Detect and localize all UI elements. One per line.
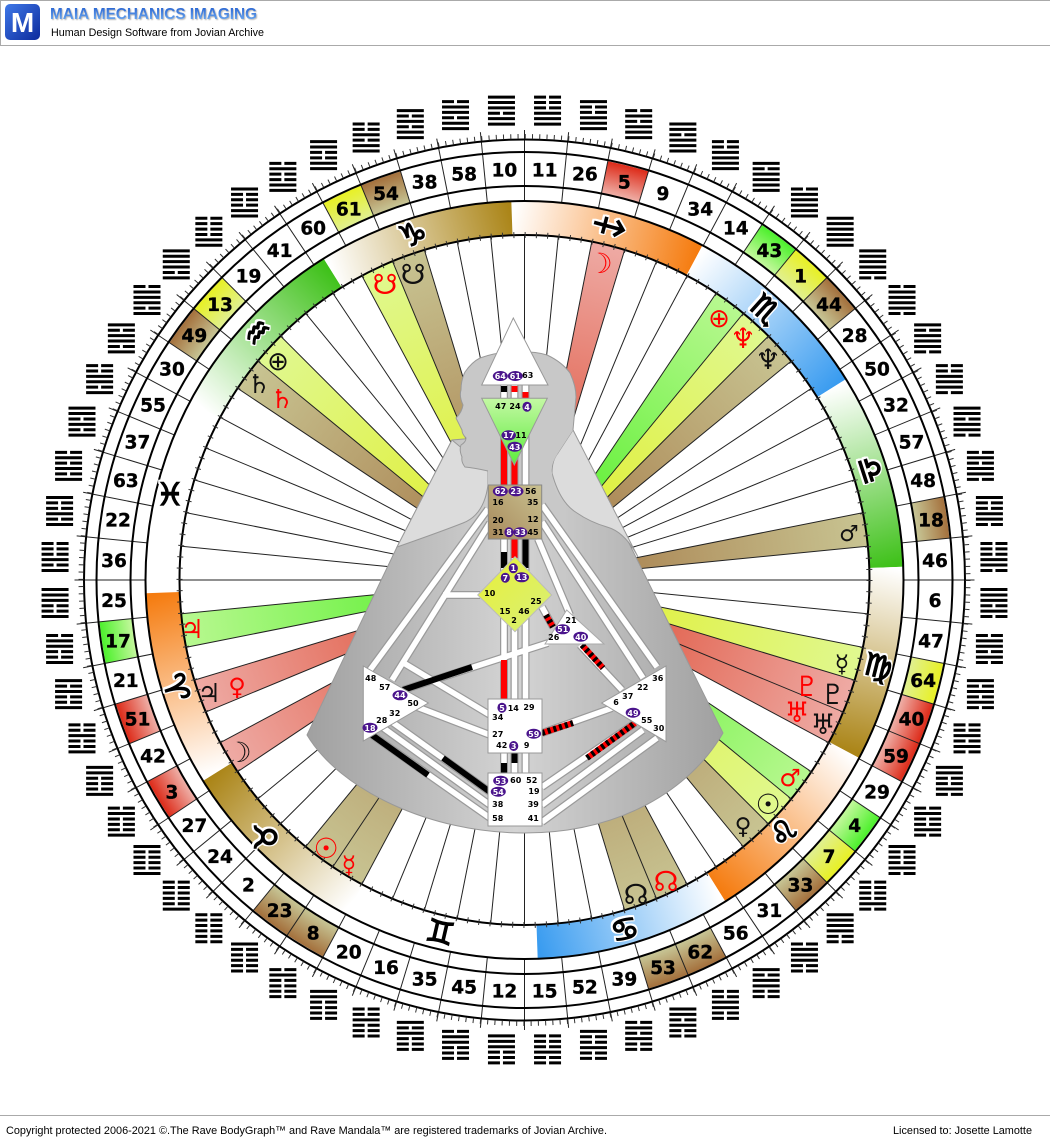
gate numbers ring: 64: [910, 671, 936, 692]
center: throat: [488, 485, 542, 539]
center: solar plexus: [602, 666, 666, 742]
gate numbers ring: 5: [618, 172, 631, 193]
gate numbers ring: 47: [918, 631, 944, 652]
bodygraph gate labels: 54: [493, 788, 504, 797]
gate numbers ring: 22: [105, 511, 131, 532]
gate numbers ring: 36: [101, 551, 127, 572]
planet glyphs: ☿: [342, 851, 356, 879]
gate numbers ring: 17: [105, 631, 131, 652]
gate numbers ring: 52: [572, 978, 598, 999]
planet glyphs: ☋: [373, 268, 397, 301]
gate numbers ring: 11: [532, 160, 558, 181]
gate numbers ring: 61: [336, 199, 362, 220]
gate numbers ring: 1: [794, 266, 807, 287]
bodygraph gate labels: 50: [407, 699, 419, 708]
bodygraph gate labels: 11: [515, 431, 527, 440]
bodygraph gate labels: 27: [492, 730, 503, 739]
planet glyphs: ☊: [624, 878, 648, 911]
planet glyphs: ☉: [755, 788, 781, 821]
planet glyphs: ♆: [730, 322, 756, 355]
gate numbers ring: 32: [883, 395, 909, 416]
bodygraph gate labels: 43: [509, 443, 520, 452]
footer: [0, 1116, 1050, 1137]
band: libra: [832, 388, 886, 567]
gate numbers ring: 9: [657, 184, 669, 205]
gate numbers ring: 49: [181, 326, 207, 347]
bodygraph gate labels: 22: [637, 683, 648, 692]
gate numbers ring: 4: [848, 816, 861, 837]
bodygraph gate labels: 59: [528, 730, 540, 739]
bodygraph gate labels: 53: [495, 777, 506, 786]
gate numbers ring: 8: [307, 924, 320, 945]
zodiac glyphs: ♓: [156, 477, 184, 513]
bodygraph gate labels: 29: [523, 703, 535, 712]
activated channels: design black: [372, 386, 526, 792]
gate numbers ring: 50: [864, 360, 890, 381]
zodiac glyphs: ♏: [743, 287, 787, 333]
planet glyphs: ♃: [197, 679, 221, 709]
gate numbers ring: 38: [412, 172, 438, 193]
zodiac glyphs: ♉: [249, 823, 285, 851]
band: sagittarius: [512, 218, 694, 260]
planet glyphs: ☽: [587, 247, 613, 280]
gate numbers ring: [101, 160, 948, 1003]
gate numbers ring: 3: [166, 782, 178, 803]
gate numbers ring: 55: [140, 395, 166, 416]
bodygraph gate labels: 12: [527, 515, 539, 524]
gate numbers ring: 15: [532, 982, 558, 1003]
gate numbers ring: 44: [816, 295, 842, 316]
bodygraph gate labels: 51: [557, 625, 569, 634]
bodygraph gate labels: 45: [527, 528, 539, 537]
gate numbers ring: 39: [611, 970, 637, 991]
planet glyphs: ☉: [313, 832, 339, 865]
gate numbers ring: 24: [207, 847, 233, 868]
gate numbers ring: 43: [756, 241, 782, 262]
planet glyphs: ☊: [654, 865, 678, 898]
bodygraph gate labels: 9: [524, 741, 530, 750]
band: leo: [716, 750, 844, 887]
planet glyphs: ♀: [228, 673, 246, 701]
gate numbers ring: 20: [336, 943, 362, 964]
bodygraph gate labels: 31: [492, 528, 504, 537]
gate numbers ring: 42: [140, 747, 166, 768]
gate numbers ring: 34: [687, 199, 713, 220]
gate numbers ring: 27: [181, 816, 207, 837]
gate numbers ring: 57: [899, 433, 924, 454]
bodygraph gate labels: 20: [492, 516, 504, 525]
bodygraph silhouette: [307, 352, 723, 833]
center: root: [488, 773, 542, 826]
bodygraph gate labels: 7: [503, 574, 508, 583]
bodygraph gate labels: 62: [495, 487, 506, 496]
bodygraph gate labels: 46: [518, 607, 530, 616]
gate numbers ring: 2: [242, 876, 255, 897]
bodygraph gate labels: 64: [495, 372, 506, 381]
bodygraph gate labels: 17: [503, 431, 514, 440]
gate numbers ring: 14: [723, 218, 749, 239]
bodygraph gate labels: 55: [641, 716, 653, 725]
planet glyphs: ♀: [735, 814, 751, 840]
gate numbers ring: 51: [125, 709, 150, 730]
bodygraph gate labels: 13: [516, 573, 527, 582]
band: taurus: [218, 772, 354, 900]
band: aquarius: [205, 273, 333, 410]
bodygraph gate labels: 28: [376, 716, 388, 725]
zodiac glyphs: ♒: [235, 311, 281, 355]
head and neck: [456, 352, 576, 540]
bodygraph gate labels: 1: [511, 564, 517, 573]
bodygraph gate labels: 26: [548, 633, 560, 642]
gate numbers ring: 26: [572, 164, 598, 185]
band: capricorn: [333, 218, 512, 273]
bodygraph gate labels: 41: [528, 814, 539, 823]
activated channels: black stripes: [542, 615, 635, 758]
bodygraph gate labels: 25: [530, 597, 542, 606]
zodiac glyphs: ♊: [422, 912, 458, 954]
planet glyphs: ☋: [401, 258, 425, 291]
bodygraph gate labels: 57: [379, 683, 390, 692]
license note: Licensed to: Josette Lamotte: [893, 1125, 1032, 1137]
bodygraph gate labels: 6: [613, 698, 619, 707]
planet glyphs: ♇: [794, 670, 820, 703]
gate numbers ring: 37: [125, 433, 150, 454]
gate numbers ring: 45: [451, 978, 477, 999]
band: aries: [163, 593, 218, 772]
gate numbers ring: 29: [864, 782, 890, 803]
center: G: [478, 557, 552, 632]
gate numbers ring: 6: [929, 591, 941, 612]
zodiac glyphs: ♌: [761, 810, 807, 856]
bodygraph gate labels: 42: [496, 741, 507, 750]
body lower cone: [307, 430, 723, 833]
planet glyphs: ♆: [755, 343, 781, 376]
bodygraph gate labels: 60: [510, 776, 522, 785]
bodygraph gate labels: 15: [499, 607, 511, 616]
band: scorpio: [694, 260, 832, 388]
gate numbers ring: 23: [267, 901, 293, 922]
gate numbers ring: 13: [207, 295, 233, 316]
gate numbers ring: 60: [300, 218, 326, 239]
gate numbers ring: 53: [650, 958, 676, 979]
bodygraph gate labels: 21: [565, 616, 577, 625]
center: sacral: [488, 699, 542, 753]
gate numbers ring: 56: [723, 924, 749, 945]
subtitle: Human Design Software from Jovian Archive: [51, 27, 264, 39]
gate numbers ring: 40: [899, 709, 924, 730]
header bar: [0, 0, 1050, 46]
bodygraph gate labels: 5: [499, 704, 505, 713]
bodygraph gate labels: 63: [522, 371, 533, 380]
gate numbers ring: 28: [842, 326, 868, 347]
bodygraph gate labels: 4: [524, 403, 530, 412]
icon: logo M: M: [11, 7, 34, 38]
gate numbers ring: 48: [910, 471, 936, 492]
zodiac glyphs: ♐: [585, 206, 631, 248]
bodygraph gate labels: 56: [525, 487, 537, 496]
planet glyphs: ☿: [835, 650, 849, 678]
bodygraph gate labels: 24: [509, 402, 521, 411]
bodygraph gate labels: 61: [510, 372, 521, 381]
gate numbers ring: 19: [236, 266, 261, 287]
gate numbers ring: 41: [267, 241, 293, 262]
bodygraph gate labels: 49: [627, 709, 639, 718]
bodygraph gate labels: 18: [364, 724, 376, 733]
bodygraph gate labels: 47: [495, 402, 506, 411]
band: cancer: [537, 887, 716, 942]
activation rays inside the wheel: [180, 242, 869, 912]
zodiac glyphs: ♈: [154, 669, 196, 707]
planet glyphs: ♅: [810, 708, 836, 741]
planet glyphs: ⊕: [267, 347, 289, 377]
icon: logo M: [5, 4, 40, 40]
planet glyphs: ☽: [226, 736, 252, 769]
zodiac glyphs: ♑: [394, 214, 432, 256]
copyright notice: Copyright protected 2006-2021 ©.The Rave BodyGraph™ and Rave Mandala™ are registered trademarks of Jovian Archive.: [6, 1125, 607, 1137]
bodygraph gate labels: 8: [506, 528, 512, 537]
bodygraph gate labels: 48: [365, 674, 377, 683]
bodygraph gate labels: 58: [492, 814, 504, 823]
bodygraph gate labels: 23: [510, 487, 522, 496]
bodygraph gate labels: 40: [575, 633, 587, 642]
gate numbers ring: 62: [687, 943, 713, 964]
title: MAIA MECHANICS IMAGING: [50, 6, 257, 23]
gate numbers ring: 35: [412, 970, 438, 991]
bodygraph gate labels: 44: [394, 691, 406, 700]
zodiac glyphs: ♋: [607, 909, 643, 951]
planet glyphs: ♇: [820, 678, 846, 711]
bodygraph gate labels: [362, 371, 665, 823]
gate numbers ring: 31: [756, 901, 782, 922]
rave mandala wheel: [42, 97, 1007, 1063]
right shoulder: [552, 430, 638, 557]
planet glyphs: [180, 247, 859, 911]
gate numbers ring: 63: [113, 471, 139, 492]
gate numbers ring: 12: [491, 982, 517, 1003]
gate numbers ring: 18: [918, 511, 944, 532]
gate numbers ring: 25: [101, 591, 127, 612]
planet glyphs: ♄: [270, 385, 294, 415]
planet glyphs: ♄: [247, 370, 271, 400]
bodygraph gate labels: 35: [527, 498, 539, 507]
bodygraph gate labels: 30: [653, 724, 665, 733]
bodygraph gate labels: 39: [528, 800, 539, 809]
planet glyphs: ♃: [180, 615, 204, 645]
gate numbers ring: 21: [113, 671, 139, 692]
bodygraph gate labels: 37: [622, 692, 633, 701]
zodiac glyphs: ♎: [849, 451, 891, 489]
zodiac glyphs: ♍: [860, 646, 896, 688]
gate numbers ring: 7: [823, 847, 835, 868]
bodygraph gate labels: 52: [526, 776, 537, 785]
gate numbers ring: 59: [883, 747, 909, 768]
zodiac band: [162, 218, 887, 942]
gate numbers ring: 46: [922, 551, 948, 572]
zodiac glyphs: [154, 206, 896, 954]
gate numbers ring: 16: [373, 958, 399, 979]
planet glyphs: ♂: [779, 764, 801, 792]
center: ego: [545, 610, 604, 644]
bodygraph gate labels: 32: [389, 709, 400, 718]
bodygraph gate labels: 14: [508, 704, 519, 713]
bodygraph gate labels: 19: [528, 787, 540, 796]
planet glyphs: ♅: [784, 696, 810, 729]
bodygraph gate labels: 36: [652, 674, 664, 683]
gate numbers ring: 54: [373, 184, 399, 205]
activated channels: personality red: [504, 386, 635, 758]
center: ajna: [482, 398, 547, 465]
hexagram ring: [42, 97, 1007, 1063]
left shoulder: [397, 440, 488, 547]
bodygraph gate labels: 10: [484, 589, 496, 598]
planet glyphs: ♂: [839, 522, 859, 547]
gate numbers ring: 10: [491, 160, 517, 181]
channels: [370, 385, 657, 822]
planet glyphs: ⊕: [708, 304, 730, 334]
bodygraph gate labels: 33: [515, 528, 526, 537]
gate numbers ring: 30: [159, 360, 185, 381]
bodygraph gate labels: 34: [492, 713, 504, 722]
gate numbers ring: 58: [451, 164, 477, 185]
coloured gate cells in number ring: [98, 161, 951, 991]
bodygraph gate labels: 38: [492, 800, 504, 809]
center: spleen: [363, 666, 428, 741]
bodygraph gate labels: 16: [492, 498, 504, 507]
band: virgo: [844, 567, 887, 750]
center: head: [482, 318, 548, 385]
bodygraph gate labels: 3: [511, 742, 516, 751]
bodygraph gate labels: 2: [511, 616, 517, 625]
gate numbers ring: 33: [788, 876, 813, 897]
